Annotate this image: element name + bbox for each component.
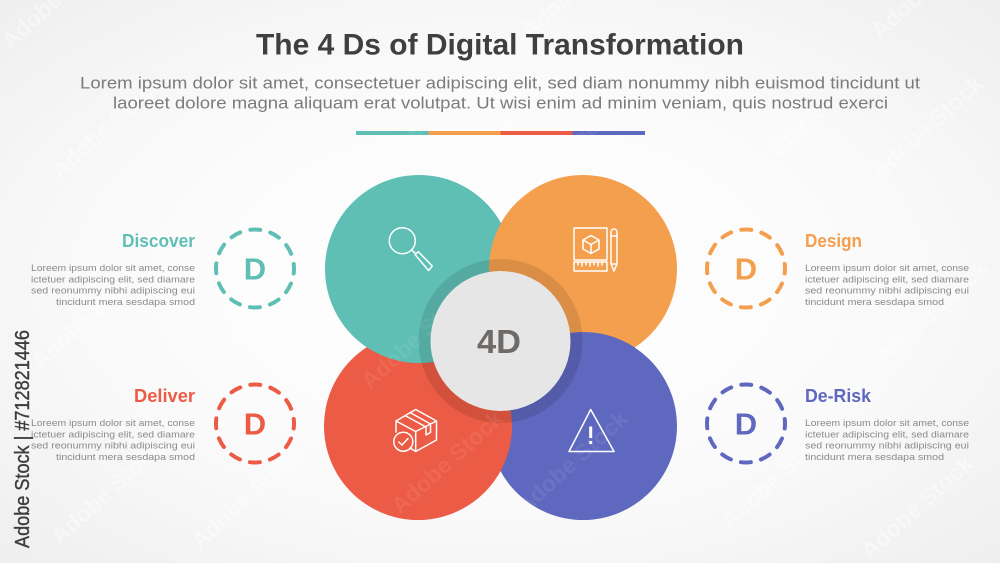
text block: de-risk: sed reonummy nibhi adipiscing eui <box>805 440 969 451</box>
badge: de-risk: D <box>735 406 757 442</box>
circle: discover overlap on deliver <box>342 322 434 363</box>
text block: design: sed reonummy nibhi adipiscing eui <box>805 285 969 296</box>
badge: deliver <box>216 384 294 462</box>
circle: deliver <box>324 332 512 520</box>
heading: discover: Discover <box>122 230 195 251</box>
text block: design: Loreem ipsum dolor sit amet, conse <box>805 262 969 273</box>
watermarks over circles: Adobe Stock <box>511 405 633 519</box>
centre ring <box>418 259 582 423</box>
text block: deliver: ictetuer adipiscing elit, sed diamare <box>31 428 195 439</box>
text block: deliver <box>31 417 195 462</box>
circle: discover <box>325 175 513 363</box>
badge: discover: D <box>244 252 266 286</box>
text block: deliver: Loreem ipsum dolor sit amet, conse <box>31 417 195 428</box>
watermarks: Adobe Stock <box>46 70 168 184</box>
watermarks over circles: Adobe Stock <box>491 105 613 219</box>
text block: design <box>805 262 969 307</box>
text block: deliver: tincidunt mera sesdapa smod <box>56 451 195 462</box>
colour divider bar <box>356 131 645 135</box>
four overlapping circles diagram <box>324 175 677 520</box>
text block: deliver: sed reonummy nibhi adipiscing eui <box>31 440 195 451</box>
panel: de-risk <box>707 384 969 462</box>
text block: de-risk: ictetuer adipiscing elit, sed diamare <box>805 428 969 439</box>
watermarks over circles: Adobe Stock <box>356 280 478 394</box>
icon: design blueprint <box>574 228 617 271</box>
watermarks: Adobe Stock <box>706 100 828 214</box>
text block: de-risk: Loreem ipsum dolor sit amet, conse <box>805 417 969 428</box>
text block: discover: ictetuer adipiscing elit, sed diamare <box>31 273 195 284</box>
circle: design <box>489 175 677 363</box>
watermarks: Adobe Stock <box>186 440 308 554</box>
watermarks over circles: Adobe Stock <box>386 405 508 519</box>
title: The 4 Ds of Digital Transformation <box>256 28 744 62</box>
subtitle: laoreet dolore magna aliquam erat volutpat. Ut wisi enim ad minim veniam, quis nostrud exerci <box>113 94 888 112</box>
text block: design: ictetuer adipiscing elit, sed diamare <box>805 273 969 284</box>
subtitle <box>80 74 920 112</box>
badge: discover <box>216 230 294 308</box>
heading: deliver: Deliver <box>134 385 195 406</box>
panel: design <box>707 230 969 308</box>
text block: discover: sed reonummy nibhi adipiscing eui <box>31 285 195 296</box>
watermarks: Adobe Stock <box>176 110 298 224</box>
watermarks: Adobe Stock <box>46 435 168 549</box>
watermarks over circles <box>356 70 633 519</box>
watermarks: Adobe Stock <box>871 255 993 369</box>
text block: design: tincidunt mera sesdapa smod <box>805 296 944 307</box>
watermarks: Adobe Stock <box>676 285 798 399</box>
badge: design <box>707 230 785 308</box>
icon: magnifying glass <box>389 228 432 270</box>
circle: de-risk <box>489 332 677 520</box>
centre disc <box>430 271 570 411</box>
text block: de-risk <box>805 417 969 462</box>
text block: discover <box>31 262 195 307</box>
text block: de-risk: tincidunt mera sesdapa smod <box>805 451 944 462</box>
centre label: 4D <box>477 323 521 360</box>
icon: delivered box <box>394 410 436 452</box>
watermarks: Adobe Stock <box>856 450 978 563</box>
heading: de-risk: De-Risk <box>805 385 872 406</box>
badge: deliver: D <box>244 406 266 442</box>
subtitle: Lorem ipsum dolor sit amet, consectetuer adipiscing elit, sed diam nonummy nibh euismod tincidunt ut <box>80 74 920 92</box>
badge: design: D <box>735 252 757 286</box>
icon: warning triangle <box>569 410 614 452</box>
stock id label: Adobe Stock | #712821446 <box>12 330 34 548</box>
watermarks: Adobe Stock <box>26 260 148 374</box>
text block: discover: Loreem ipsum dolor sit amet, conse <box>31 262 195 273</box>
watermarks over circles: Adobe Stock <box>356 70 478 184</box>
panel: deliver <box>31 384 294 462</box>
panel: discover <box>31 230 294 308</box>
heading: design: Design <box>805 230 862 251</box>
watermarks: Adobe Stock <box>221 240 343 354</box>
watermarks: Adobe Stock <box>866 70 988 184</box>
text block: discover: tincidunt mera sesdapa smod <box>56 296 195 307</box>
watermarks: Adobe Stock <box>716 420 838 534</box>
badge: de-risk <box>707 384 785 462</box>
